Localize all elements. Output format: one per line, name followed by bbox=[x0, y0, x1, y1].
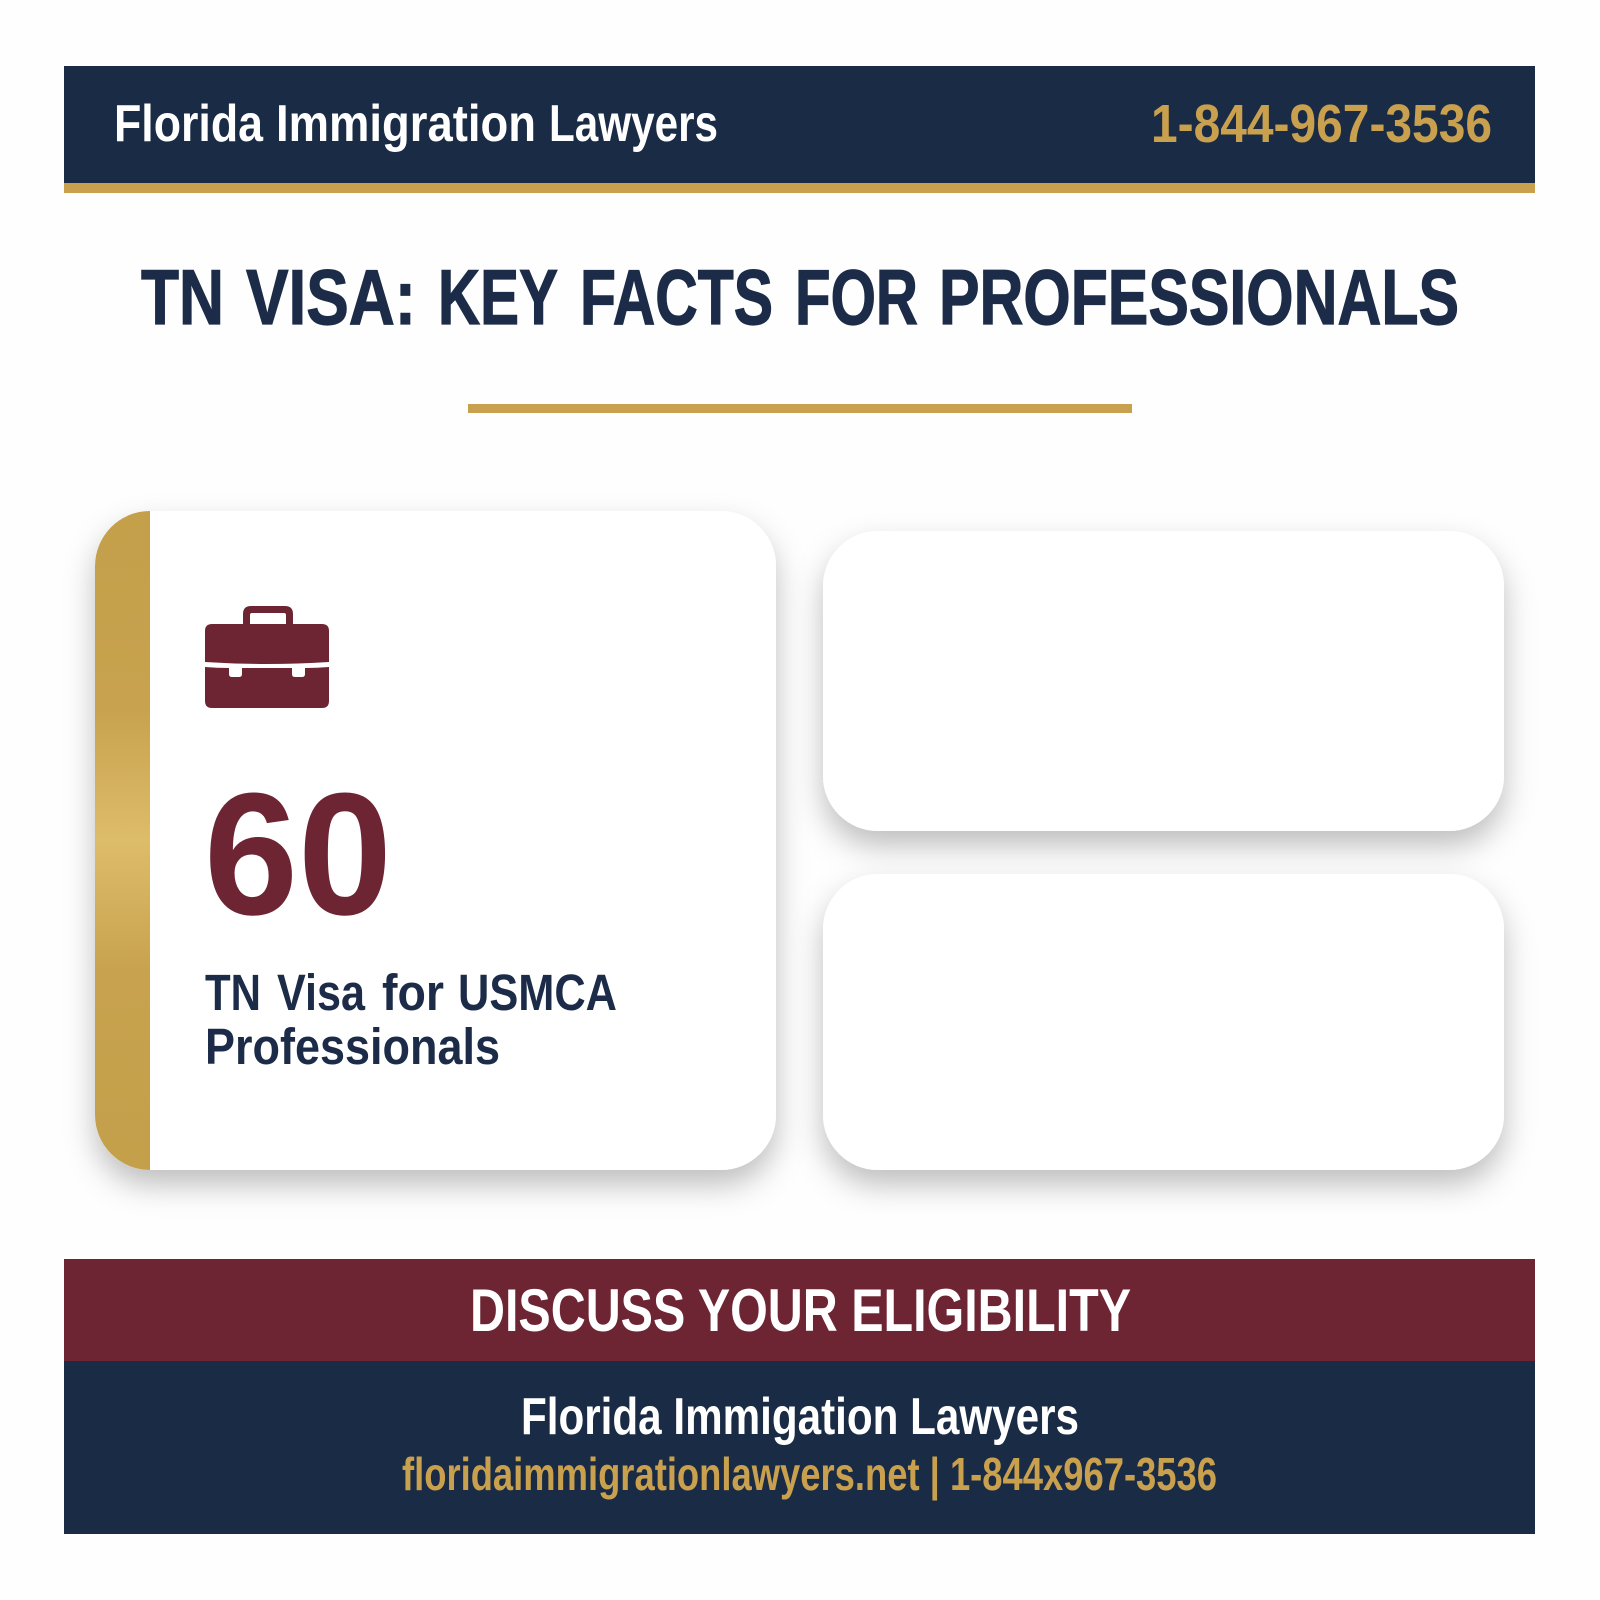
footer firm name: Florida Immigation Lawyers bbox=[521, 1388, 1079, 1446]
card label: Visa bbox=[277, 964, 366, 1021]
title underline bbox=[468, 404, 1132, 413]
card label: for bbox=[382, 964, 444, 1021]
title: FOR bbox=[795, 253, 918, 341]
card label: Professionals bbox=[205, 1018, 500, 1075]
header firm name bbox=[114, 95, 718, 153]
title: PROFESSIONALS bbox=[939, 253, 1459, 341]
icon: briefcase bbox=[205, 606, 329, 708]
panel: empty top card bbox=[823, 531, 1504, 831]
title: FACTS bbox=[580, 253, 773, 341]
title: KEY bbox=[438, 253, 558, 341]
header firm name: Lawyers bbox=[549, 95, 718, 153]
stat number: 60 bbox=[204, 756, 392, 951]
header firm name: Immigration bbox=[276, 95, 536, 153]
call to action band bbox=[64, 1259, 1535, 1361]
footer band bbox=[64, 1361, 1535, 1534]
title: TN bbox=[141, 253, 224, 341]
footer contact line: floridaimmigrationlawyers.net | 1-844x967-3536 bbox=[402, 1448, 1217, 1500]
gold side bar bbox=[95, 511, 150, 1170]
call to action heading: DISCUSS YOUR ELIGIBILITY bbox=[470, 1277, 1131, 1344]
card label: TN bbox=[205, 964, 261, 1021]
panel: empty bottom card bbox=[823, 874, 1504, 1170]
header phone number: 1-844-967-3536 bbox=[1151, 94, 1492, 154]
header firm name: Florida bbox=[114, 95, 264, 153]
title bbox=[141, 253, 1459, 341]
panel: TN visa card bbox=[95, 511, 776, 1170]
card label bbox=[205, 964, 617, 1075]
title: VISA: bbox=[246, 253, 416, 341]
card label: USMCA bbox=[458, 964, 617, 1021]
header band bbox=[64, 66, 1535, 193]
